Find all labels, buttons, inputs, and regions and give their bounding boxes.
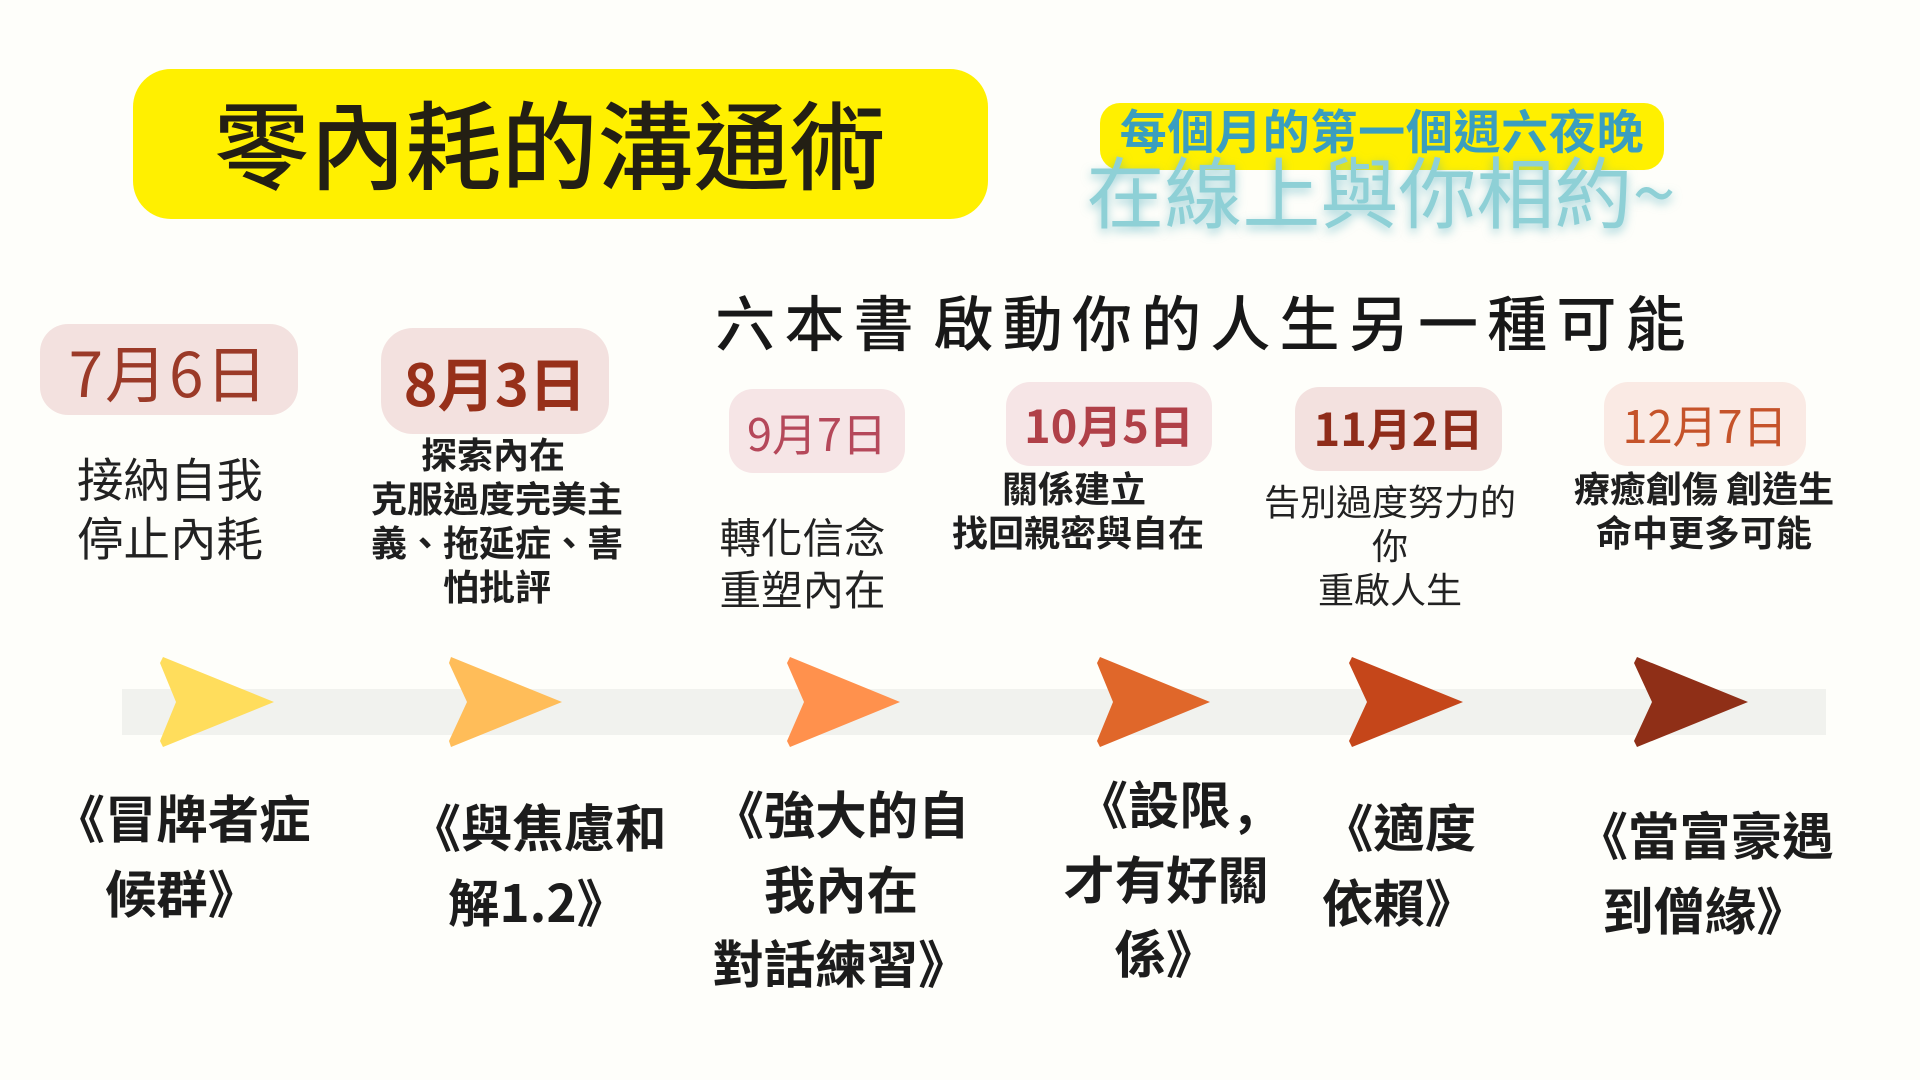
- description: November: 你: [1372, 518, 1408, 570]
- description: November: 告別過度努力的: [1264, 474, 1516, 526]
- date pill: December: 12月7日: [1623, 390, 1787, 456]
- description: October: 找回親密與自在: [952, 505, 1204, 557]
- book title: August: 解1.2》: [448, 862, 628, 937]
- book title: October: 《設限,: [1077, 764, 1253, 839]
- arrow 1: [160, 657, 274, 747]
- book title: October: [1063, 764, 1269, 988]
- description: October: 關係建立: [1002, 461, 1146, 513]
- description: July: 接納自我: [77, 444, 263, 511]
- arrow 4: [1097, 657, 1210, 747]
- book title: December: [1577, 795, 1833, 945]
- description: August: 義、拖延症、害: [371, 515, 623, 567]
- description: August: [371, 427, 623, 611]
- book title: September: 對話練習》: [713, 923, 969, 998]
- book title: July: 《冒牌者症: [54, 778, 310, 853]
- book title: October: 係》: [1115, 913, 1217, 988]
- arrow 2: [449, 657, 562, 747]
- date pill: December: [1604, 382, 1806, 466]
- subtitle: 六本書 啟動你的人生另一種可能: [715, 277, 1695, 364]
- description: August: 怕批評: [443, 559, 551, 611]
- date pill: September: [729, 389, 905, 473]
- book title: August: [410, 787, 666, 937]
- description: December: [1574, 461, 1834, 557]
- book title: July: 候群》: [105, 853, 259, 928]
- description: November: 重啟人生: [1318, 562, 1462, 614]
- date pill: October: 10月5日: [1024, 390, 1194, 456]
- arrow 3: [787, 657, 900, 747]
- description: October: [952, 461, 1204, 557]
- book title: December: 到僧緣》: [1602, 870, 1808, 945]
- glowing invitation text: 在線上與你相約~: [1086, 133, 1676, 245]
- book title: December: 《當富豪遇: [1577, 795, 1833, 870]
- description: November: [1264, 474, 1516, 614]
- timeline bar: [122, 689, 1826, 735]
- description: July: 停止內耗: [77, 503, 263, 570]
- book title: November: 《適度: [1322, 787, 1476, 862]
- description: December: 療癒創傷 創造生: [1574, 461, 1834, 513]
- date pill: November: 11月2日: [1314, 394, 1483, 459]
- description: August: 探索內在: [421, 427, 565, 479]
- description: September: 重塑內在: [719, 557, 886, 617]
- timeline with arrows: [122, 657, 1826, 747]
- book title: November: [1322, 787, 1476, 937]
- date pill: October: [1006, 382, 1212, 466]
- description: August: 克服過度完美主: [371, 471, 623, 523]
- description: July: [77, 444, 263, 570]
- date pill: November: [1295, 387, 1502, 471]
- date pill: July: 7月6日: [69, 324, 269, 414]
- description: September: 轉化信念: [719, 505, 886, 565]
- description: September: [719, 505, 886, 617]
- book title: September: 《強大的自: [713, 774, 969, 849]
- date pill: September: 9月7日: [747, 398, 887, 464]
- date pill: August: [381, 328, 609, 434]
- date pill: August: 8月3日: [404, 339, 586, 423]
- book title: September: [713, 774, 969, 998]
- book title: August: 《與焦慮和: [410, 787, 666, 862]
- book title: November: 依賴》: [1322, 862, 1476, 937]
- arrow 5: [1349, 657, 1463, 747]
- title banner: 零內耗的溝通術: [214, 70, 886, 210]
- schedule note: monthly online session: [1086, 94, 1676, 245]
- book title: September: 我內在: [764, 849, 918, 924]
- schedule badge: 每個月的第一個週六夜晚: [1120, 94, 1644, 163]
- description: December: 命中更多可能: [1596, 505, 1812, 557]
- book title: October: 才有好關: [1063, 839, 1269, 914]
- arrow 6: [1634, 657, 1748, 747]
- book title: July: [54, 778, 310, 928]
